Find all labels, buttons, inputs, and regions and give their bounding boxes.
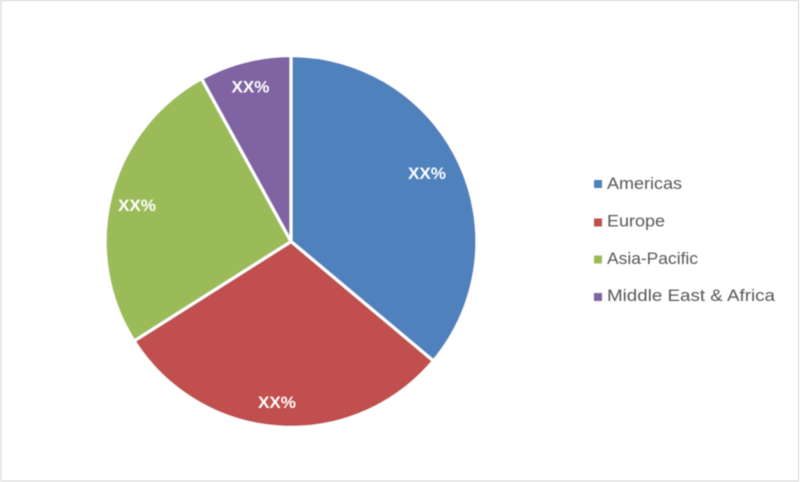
legend item: Europe: Europe — [607, 212, 665, 230]
slice: Asia-Pacific — [105, 78, 291, 341]
data labels — [118, 78, 446, 412]
slice: Americas — [291, 56, 477, 361]
label: Europe value: XX% — [258, 394, 296, 412]
legend item: Middle East & Africa: Middle East & Africa — [607, 287, 776, 305]
label: Americas value: XX% — [408, 165, 446, 183]
legend item: Americas: Americas — [607, 175, 682, 193]
slice: Middle East & Africa — [202, 56, 291, 242]
slice: Europe — [134, 242, 434, 427]
legend — [594, 175, 776, 305]
pie chart — [105, 56, 477, 427]
legend item: Asia-Pacific: Asia-Pacific — [607, 250, 698, 268]
label: Asia-Pacific value: XX% — [118, 197, 156, 215]
label: Middle East & Africa value: XX% — [232, 78, 270, 96]
